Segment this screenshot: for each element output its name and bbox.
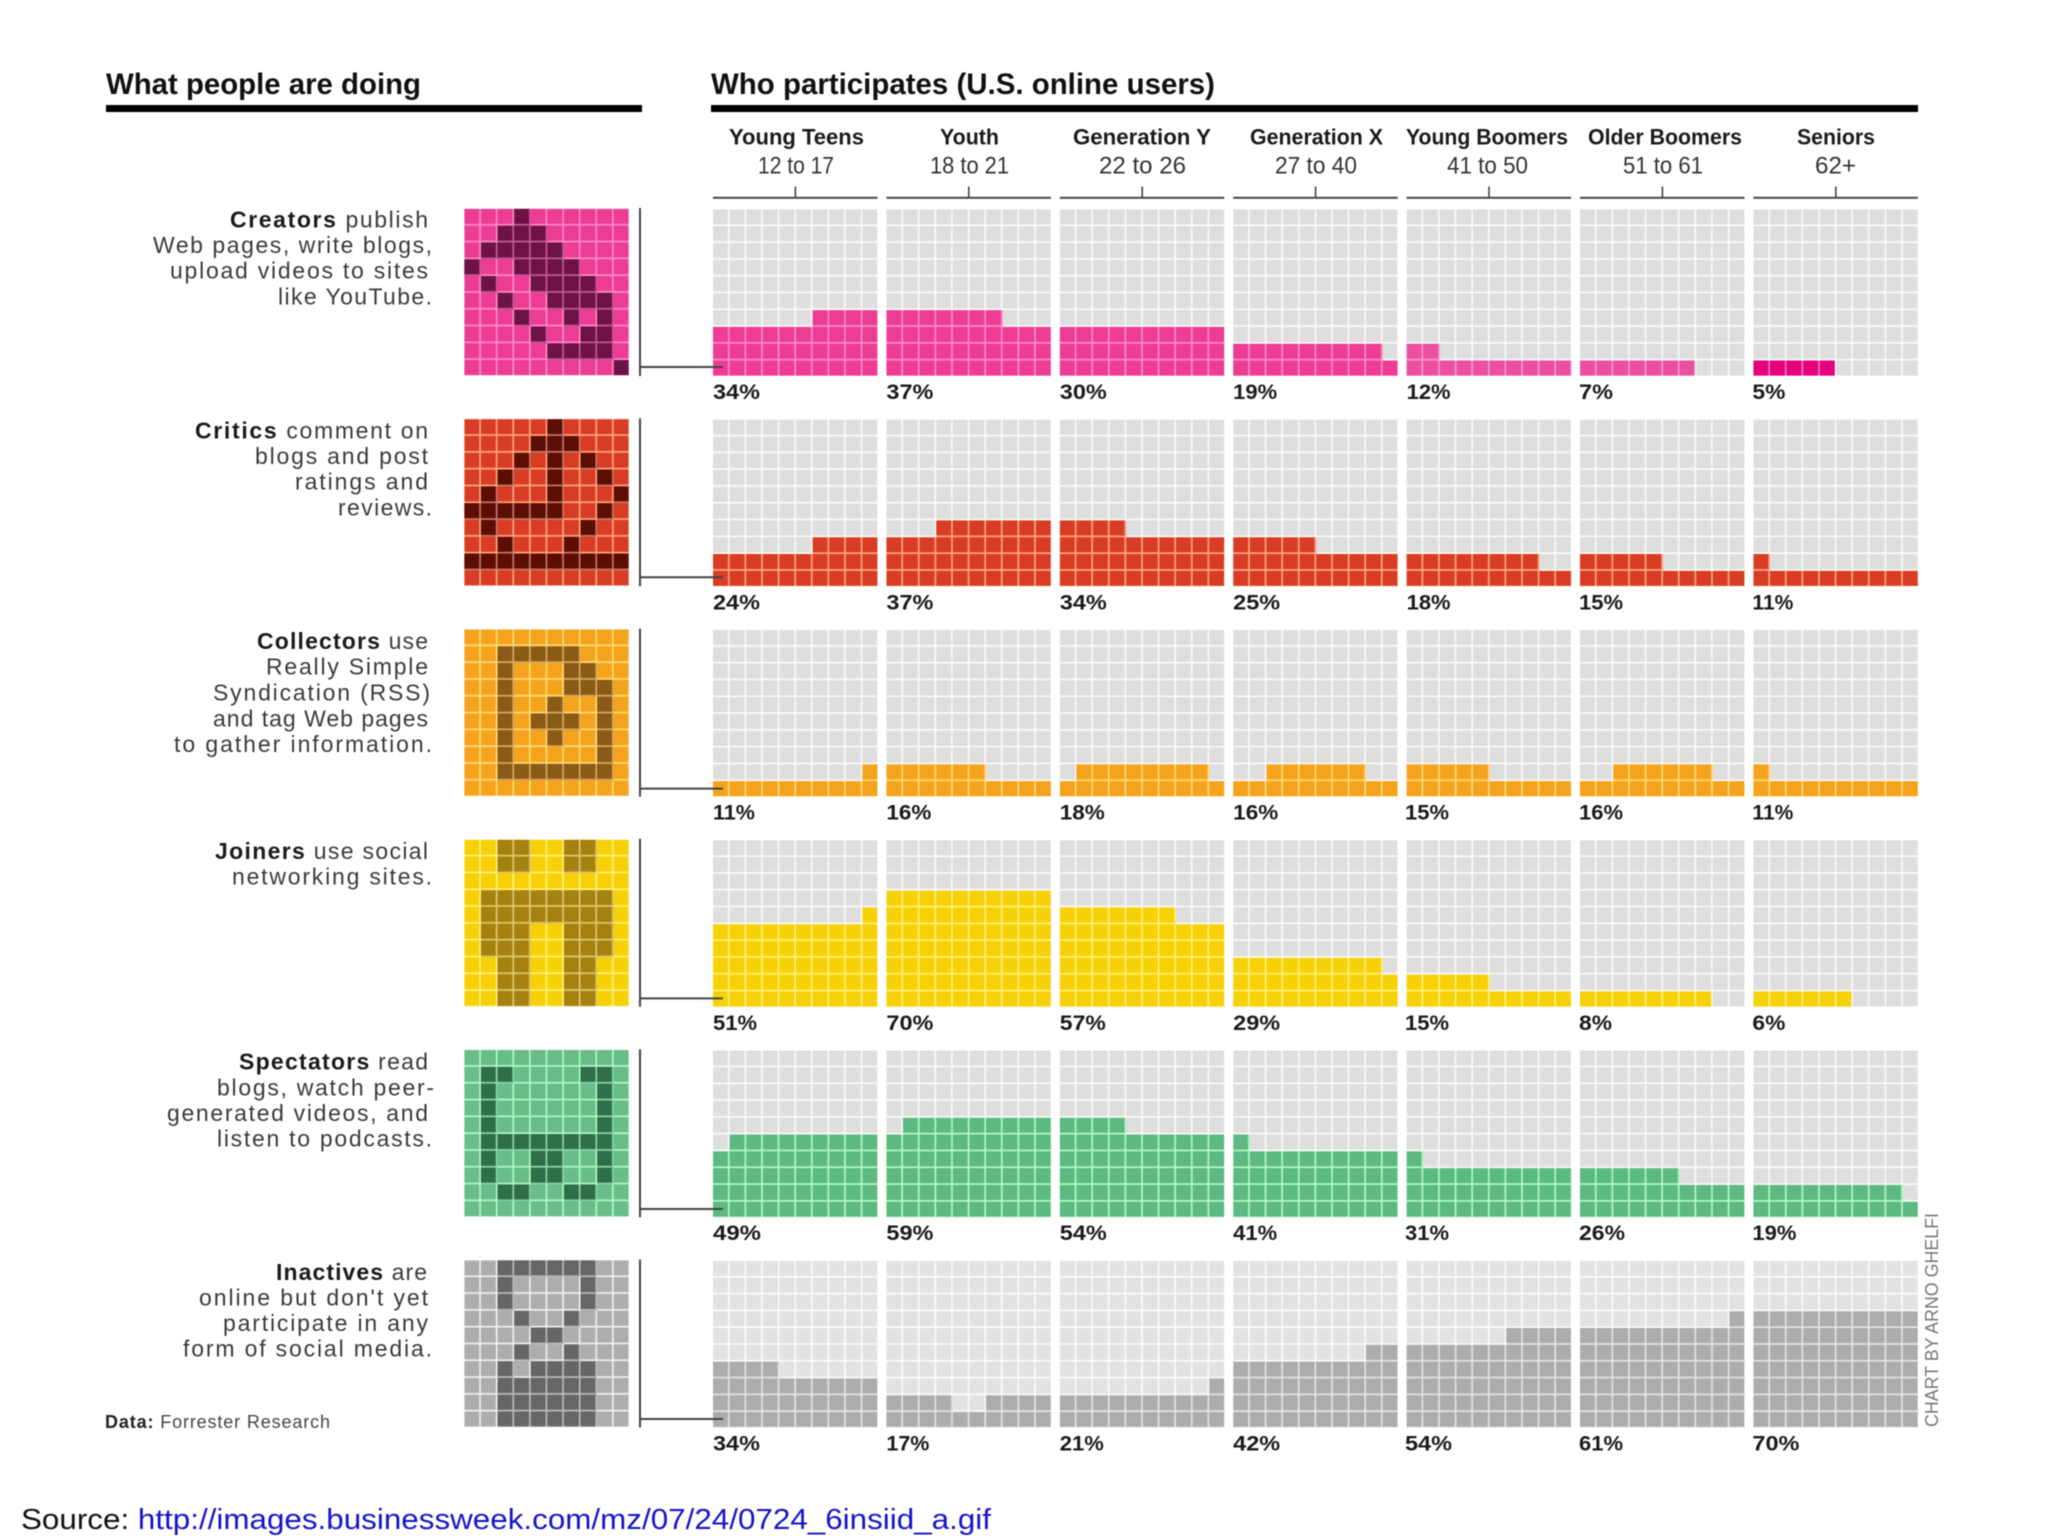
chart: Spectators, Seniors <box>1753 1050 1918 1217</box>
value: 54% <box>1060 1222 1107 1245</box>
value: 42% <box>1233 1432 1281 1456</box>
connector line <box>640 629 723 797</box>
value: 11% <box>713 802 755 825</box>
column header: Seniors: 62+ <box>1815 152 1856 179</box>
value: 15% <box>1405 802 1449 825</box>
chart: Joiners, Generation X <box>1233 840 1398 1007</box>
column headers <box>713 125 1918 199</box>
value: 37% <box>886 381 934 404</box>
text: Creators description: Creators publish <box>230 206 428 232</box>
value: 70% <box>1752 1432 1800 1456</box>
text: Collectors description: and tag Web pages <box>213 705 428 731</box>
chart: Collectors, Generation Y <box>1060 630 1224 796</box>
value: 16% <box>1579 802 1623 825</box>
panel: Joiners <box>215 838 1918 1035</box>
heading: Who participates: Who participates (U.S. online users) <box>711 68 1215 101</box>
value: 37% <box>886 591 934 614</box>
value: 21% <box>1060 1432 1104 1456</box>
text: Inactives description: form of social media. <box>183 1336 432 1362</box>
column header: Youth <box>886 125 1051 199</box>
text: Critics description: Critics comment on <box>195 418 428 444</box>
column header: Seniors: Seniors <box>1797 125 1875 150</box>
panel: Creators <box>153 206 1918 404</box>
text: Critics description: ratings and <box>295 469 428 495</box>
chart: Creators, Youth <box>886 209 1051 376</box>
value: 31% <box>1405 1222 1449 1245</box>
value: 16% <box>886 802 932 825</box>
connector line <box>640 1260 723 1428</box>
connector line <box>640 208 723 376</box>
text: Spectators description: blogs, watch peer- <box>217 1074 434 1100</box>
connector line <box>640 1049 723 1217</box>
chart: Critics, Generation Y <box>1060 420 1224 586</box>
value: 29% <box>1233 1012 1281 1035</box>
text: Spectators description: Spectators read <box>239 1048 428 1074</box>
icon: Creators pixel pencil <box>464 209 629 375</box>
value: 49% <box>713 1222 761 1245</box>
chart: Joiners, Young Boomers <box>1407 840 1571 1007</box>
chart: Collectors, Older Boomers <box>1580 630 1745 796</box>
chart: Inactives, Older Boomers <box>1580 1261 1745 1427</box>
chart: Spectators, Older Boomers <box>1580 1050 1745 1217</box>
chart: Inactives, Generation X <box>1233 1261 1398 1427</box>
chart: Creators, Generation Y <box>1060 209 1224 376</box>
text: Inactives description <box>183 1259 432 1362</box>
value: 24% <box>713 591 760 614</box>
column header: Young Boomers: 41 to 50 <box>1447 152 1528 179</box>
chart: Creators, Older Boomers <box>1580 209 1745 376</box>
text: Collectors description: Really Simple <box>266 654 428 680</box>
text: Collectors description <box>174 628 432 757</box>
chart: Spectators, Young Teens <box>713 1050 878 1217</box>
chart: Inactives, Young Boomers <box>1407 1261 1571 1427</box>
column header: Youth: Youth <box>940 125 999 150</box>
column header: Seniors <box>1753 125 1918 199</box>
value: 61% <box>1579 1432 1623 1456</box>
connector line <box>640 839 723 1007</box>
value: 30% <box>1060 381 1107 404</box>
value: 26% <box>1579 1222 1625 1245</box>
value: 19% <box>1233 381 1278 404</box>
chart: Inactives, Seniors <box>1753 1261 1918 1427</box>
column header: Generation Y: Generation Y <box>1073 125 1211 150</box>
text: Creators description: upload videos to sites <box>170 258 428 284</box>
value: 12% <box>1407 381 1451 404</box>
chart: Critics, Young Teens <box>713 420 878 586</box>
chart: Critics, Older Boomers <box>1580 420 1745 586</box>
value: 15% <box>1579 591 1623 614</box>
chart: Critics, Generation X <box>1233 420 1398 586</box>
text: Joiners description <box>215 838 432 890</box>
chart: Spectators, Youth <box>886 1050 1051 1217</box>
source line: Source: http://images.businessweek.com/mz/07/24/0724_6insiid_a.gif <box>21 1504 992 1536</box>
chart: Collectors, Generation X <box>1233 630 1398 796</box>
text: Inactives description: participate in any <box>223 1310 428 1336</box>
chart: Critics, Young Boomers <box>1407 420 1571 586</box>
data credit: Data: Forrester Research <box>105 1412 330 1432</box>
value: 57% <box>1060 1012 1106 1035</box>
column header: Generation X: 27 to 40 <box>1275 152 1357 179</box>
column header: Older Boomers: 51 to 61 <box>1623 152 1703 179</box>
icon: Collectors pixel tag <box>464 629 629 796</box>
chart: Spectators, Generation X <box>1233 1050 1398 1217</box>
chart: Joiners, Generation Y <box>1060 840 1224 1007</box>
chart: Collectors, Seniors <box>1753 630 1918 796</box>
value: 6% <box>1752 1012 1786 1035</box>
column header: Generation Y: 22 to 26 <box>1099 152 1186 179</box>
value: 25% <box>1233 591 1281 614</box>
text: Collectors description: Syndication (RSS) <box>213 680 430 706</box>
text: Spectators description: generated videos, and <box>167 1100 428 1126</box>
chart: Joiners, Young Teens <box>713 840 878 1007</box>
value: 17% <box>886 1432 930 1456</box>
icon: Inactives pixel figure <box>464 1260 629 1427</box>
text: Spectators description: listen to podcasts. <box>217 1126 432 1152</box>
chart: Creators, Young Teens <box>713 209 878 376</box>
heading: What people are doing <box>106 68 642 112</box>
chart: Joiners, Seniors <box>1753 840 1918 1007</box>
chart: Creators, Generation X <box>1233 209 1398 376</box>
chart: Critics, Seniors <box>1753 420 1918 586</box>
heading: What people are doing: What people are doing <box>106 68 421 101</box>
chart: Inactives, Young Teens <box>713 1261 878 1427</box>
text: Collectors description: Collectors use <box>257 628 428 654</box>
value: 7% <box>1579 381 1613 404</box>
value: 41% <box>1233 1222 1278 1245</box>
text: Critics description <box>195 418 432 520</box>
text: Joiners description: Joiners use social <box>215 838 428 864</box>
connector line <box>640 418 723 586</box>
value: 34% <box>713 1432 760 1456</box>
value: 5% <box>1752 381 1786 404</box>
chart: Inactives, Youth <box>886 1261 1051 1427</box>
column header: Older Boomers <box>1580 125 1744 199</box>
chart: Joiners, Youth <box>886 840 1051 1007</box>
icon: Critics pixel megaphone <box>464 419 629 586</box>
chart credit: CHART BY ARNO GHELFI <box>1921 1213 1942 1427</box>
panel: Spectators <box>167 1048 1918 1245</box>
icon: Joiners pixel figure <box>464 840 629 1006</box>
chart: Collectors, Youth <box>886 630 1051 796</box>
text: Creators description: Web pages, write blogs, <box>153 232 432 258</box>
chart: Critics, Youth <box>886 420 1051 586</box>
value: 18% <box>1060 802 1105 825</box>
icon: Spectators pixel glasses <box>464 1050 629 1216</box>
value: 15% <box>1405 1012 1449 1035</box>
text: Inactives description: online but don't yet <box>199 1285 429 1311</box>
value: 51% <box>713 1012 757 1035</box>
value: 54% <box>1405 1432 1452 1456</box>
heading: Who participates <box>711 68 1918 112</box>
column header: Young Teens <box>713 125 878 199</box>
column header: Generation X: Generation X <box>1250 125 1383 150</box>
panel: Critics <box>195 418 1918 614</box>
column header: Young Teens: 12 to 17 <box>758 152 834 179</box>
value: 16% <box>1233 802 1279 825</box>
column header: Older Boomers: Older Boomers <box>1588 125 1742 150</box>
chart: Spectators, Young Boomers <box>1407 1050 1571 1217</box>
column header: Generation Y <box>1060 125 1224 199</box>
text: Critics description: blogs and post <box>255 443 429 469</box>
chart: Creators, Seniors <box>1753 209 1918 376</box>
chart: Collectors, Young Teens <box>713 630 878 796</box>
chart: Collectors, Young Boomers <box>1407 630 1571 796</box>
column header: Young Teens: Young Teens <box>729 125 864 150</box>
chart: Spectators, Generation Y <box>1060 1050 1224 1217</box>
value: 8% <box>1579 1012 1612 1035</box>
text: Critics description: reviews. <box>338 494 432 520</box>
text: Joiners description: networking sites. <box>232 864 432 890</box>
value: 59% <box>886 1222 934 1245</box>
column header: Youth: 18 to 21 <box>930 152 1009 179</box>
panel: Inactives <box>183 1259 1918 1456</box>
value: 34% <box>1060 591 1107 614</box>
column header: Young Boomers <box>1406 125 1571 199</box>
value: 19% <box>1752 1222 1797 1245</box>
panel: Collectors <box>174 628 1918 825</box>
chart: Joiners, Older Boomers <box>1580 840 1745 1007</box>
column header: Generation X <box>1233 125 1398 199</box>
text: Spectators description <box>167 1048 434 1152</box>
chart: Inactives, Generation Y <box>1060 1261 1224 1427</box>
column header: Young Boomers: Young Boomers <box>1406 125 1568 150</box>
value: 11% <box>1752 802 1794 825</box>
value: 18% <box>1407 591 1451 614</box>
text: Inactives description: Inactives are <box>276 1259 427 1285</box>
chart: Creators, Young Boomers <box>1407 209 1571 376</box>
text: Creators description: like YouTube. <box>278 284 432 310</box>
value: 34% <box>713 381 760 404</box>
value: 11% <box>1752 591 1794 614</box>
text: Creators description <box>153 206 432 310</box>
text: Collectors description: to gather information. <box>174 731 432 757</box>
value: 70% <box>886 1012 934 1035</box>
